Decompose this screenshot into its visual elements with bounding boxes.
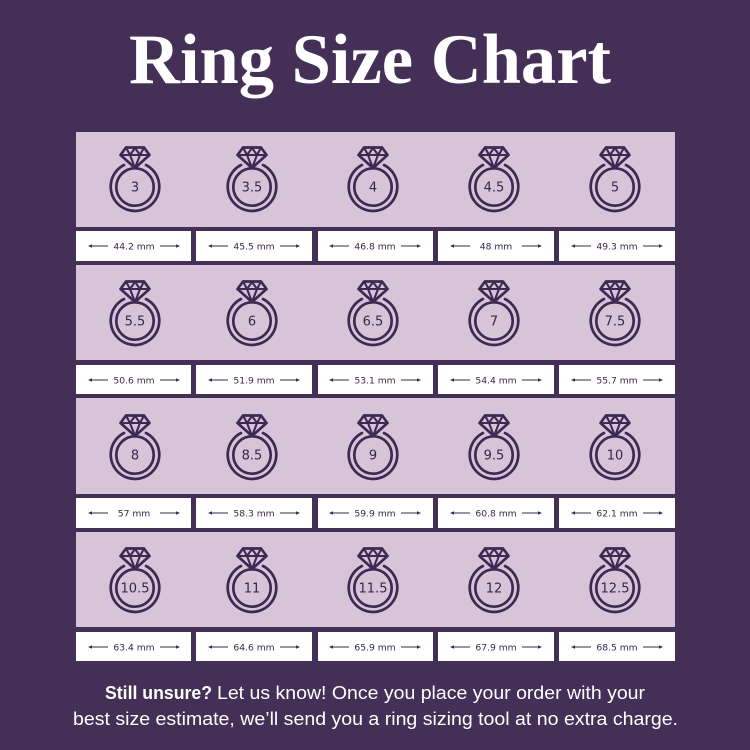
measurements: sizes 8 to 10	[76, 498, 675, 528]
ring: size 4	[349, 148, 397, 211]
measurements: sizes 3 to 5	[76, 231, 675, 261]
ring: size 3.5	[228, 148, 276, 211]
ring: size 10.5: 10.5	[121, 582, 149, 597]
measurements: sizes 5.5 to 7.5: 55.7 mm	[596, 375, 638, 386]
footer text: best size estimate, we’ll send you a ring sizing tool at no extra charge.	[73, 709, 678, 729]
measurements: sizes 10.5 to 12.5: 64.6 mm	[233, 642, 275, 653]
footer text	[73, 683, 678, 729]
ring: size 6.5	[349, 282, 397, 345]
measurements: sizes 8 to 10: 62.1 mm	[596, 508, 638, 519]
ring: size 9.5	[470, 416, 518, 479]
ring: size 7: 7	[490, 315, 498, 330]
measurements: sizes 5.5 to 7.5	[76, 365, 675, 394]
measurements: sizes 10.5 to 12.5: 67.9 mm	[475, 642, 517, 653]
ring: size 11.5: 11.5	[359, 582, 387, 597]
measurements: sizes 3 to 5: 48 mm	[480, 241, 512, 252]
measurements: sizes 8 to 10: 58.3 mm	[233, 508, 275, 519]
ring: size 10: 10	[607, 449, 623, 464]
ring: size 11.5	[349, 548, 397, 612]
ring: size 3	[111, 148, 159, 211]
ring: size 6.5: 6.5	[363, 315, 383, 330]
measurements: sizes 3 to 5: 44.2 mm	[113, 241, 155, 252]
ring: size 6	[228, 282, 276, 345]
panel: sizes 8 to 10	[76, 398, 675, 494]
measurements: sizes 10.5 to 12.5: 65.9 mm	[354, 642, 396, 653]
ring: size 12: 12	[486, 582, 502, 597]
measurements: sizes 5.5 to 7.5: 53.1 mm	[354, 375, 396, 386]
ring: size 8.5: 8.5	[242, 449, 262, 464]
panel: sizes 5.5 to 7.5	[76, 265, 675, 360]
ring: size 5.5	[111, 282, 159, 345]
measurements: sizes 10.5 to 12.5: 68.5 mm	[596, 642, 638, 653]
ring: size 6: 6	[248, 315, 256, 330]
ring: size 9: 9	[369, 449, 377, 464]
ring: size 7.5: 7.5	[605, 315, 625, 330]
measurements: sizes 8 to 10: 57 mm	[118, 508, 150, 519]
measurements: sizes 3 to 5: 46.8 mm	[354, 241, 396, 252]
ring: size 5.5: 5.5	[125, 315, 145, 330]
ring: size 8: 8	[131, 449, 139, 464]
measurements: sizes 3 to 5: 49.3 mm	[596, 241, 638, 252]
ring: size 11	[228, 548, 276, 612]
footer text: Let us know! Once you place your order with your	[217, 683, 645, 703]
ring: size 5: 5	[611, 181, 619, 196]
measurements: sizes 5.5 to 7.5: 54.4 mm	[475, 375, 517, 386]
ring: size 12.5	[591, 548, 639, 612]
measurements: sizes 10.5 to 12.5: 63.4 mm	[113, 642, 155, 653]
ring: size 8	[111, 416, 159, 479]
ring: size 11: 11	[244, 582, 260, 597]
title: Ring Size Chart	[129, 21, 611, 99]
panel: sizes 10.5 to 12.5	[76, 532, 675, 627]
measurements: sizes 5.5 to 7.5: 50.6 mm	[113, 375, 155, 386]
ring: size 10.5	[111, 548, 159, 612]
ring: size 3.5: 3.5	[242, 181, 262, 196]
panel: sizes 3 to 5	[76, 132, 675, 227]
footer text: Still unsure?	[105, 683, 212, 703]
ring: size 4.5	[470, 148, 518, 211]
measurements: sizes 5.5 to 7.5: 51.9 mm	[233, 375, 275, 386]
measurements: sizes 10.5 to 12.5	[76, 632, 675, 661]
ring: size 5	[591, 148, 639, 211]
ring: size 12.5: 12.5	[601, 582, 629, 597]
measurements: sizes 8 to 10: 60.8 mm	[475, 508, 517, 519]
ring: size 9	[349, 416, 397, 479]
ring: size 9.5: 9.5	[484, 449, 504, 464]
ring: size 7.5	[591, 282, 639, 345]
ring: size 8.5	[228, 416, 276, 479]
ring: size 10	[591, 416, 639, 479]
measurements: sizes 8 to 10: 59.9 mm	[354, 508, 396, 519]
measurements: sizes 3 to 5: 45.5 mm	[233, 241, 275, 252]
ring: size 7	[470, 282, 518, 345]
ring: size 12	[470, 548, 518, 612]
ring: size 3: 3	[131, 181, 139, 196]
ring: size 4: 4	[369, 181, 377, 196]
ring: size 4.5: 4.5	[484, 181, 504, 196]
